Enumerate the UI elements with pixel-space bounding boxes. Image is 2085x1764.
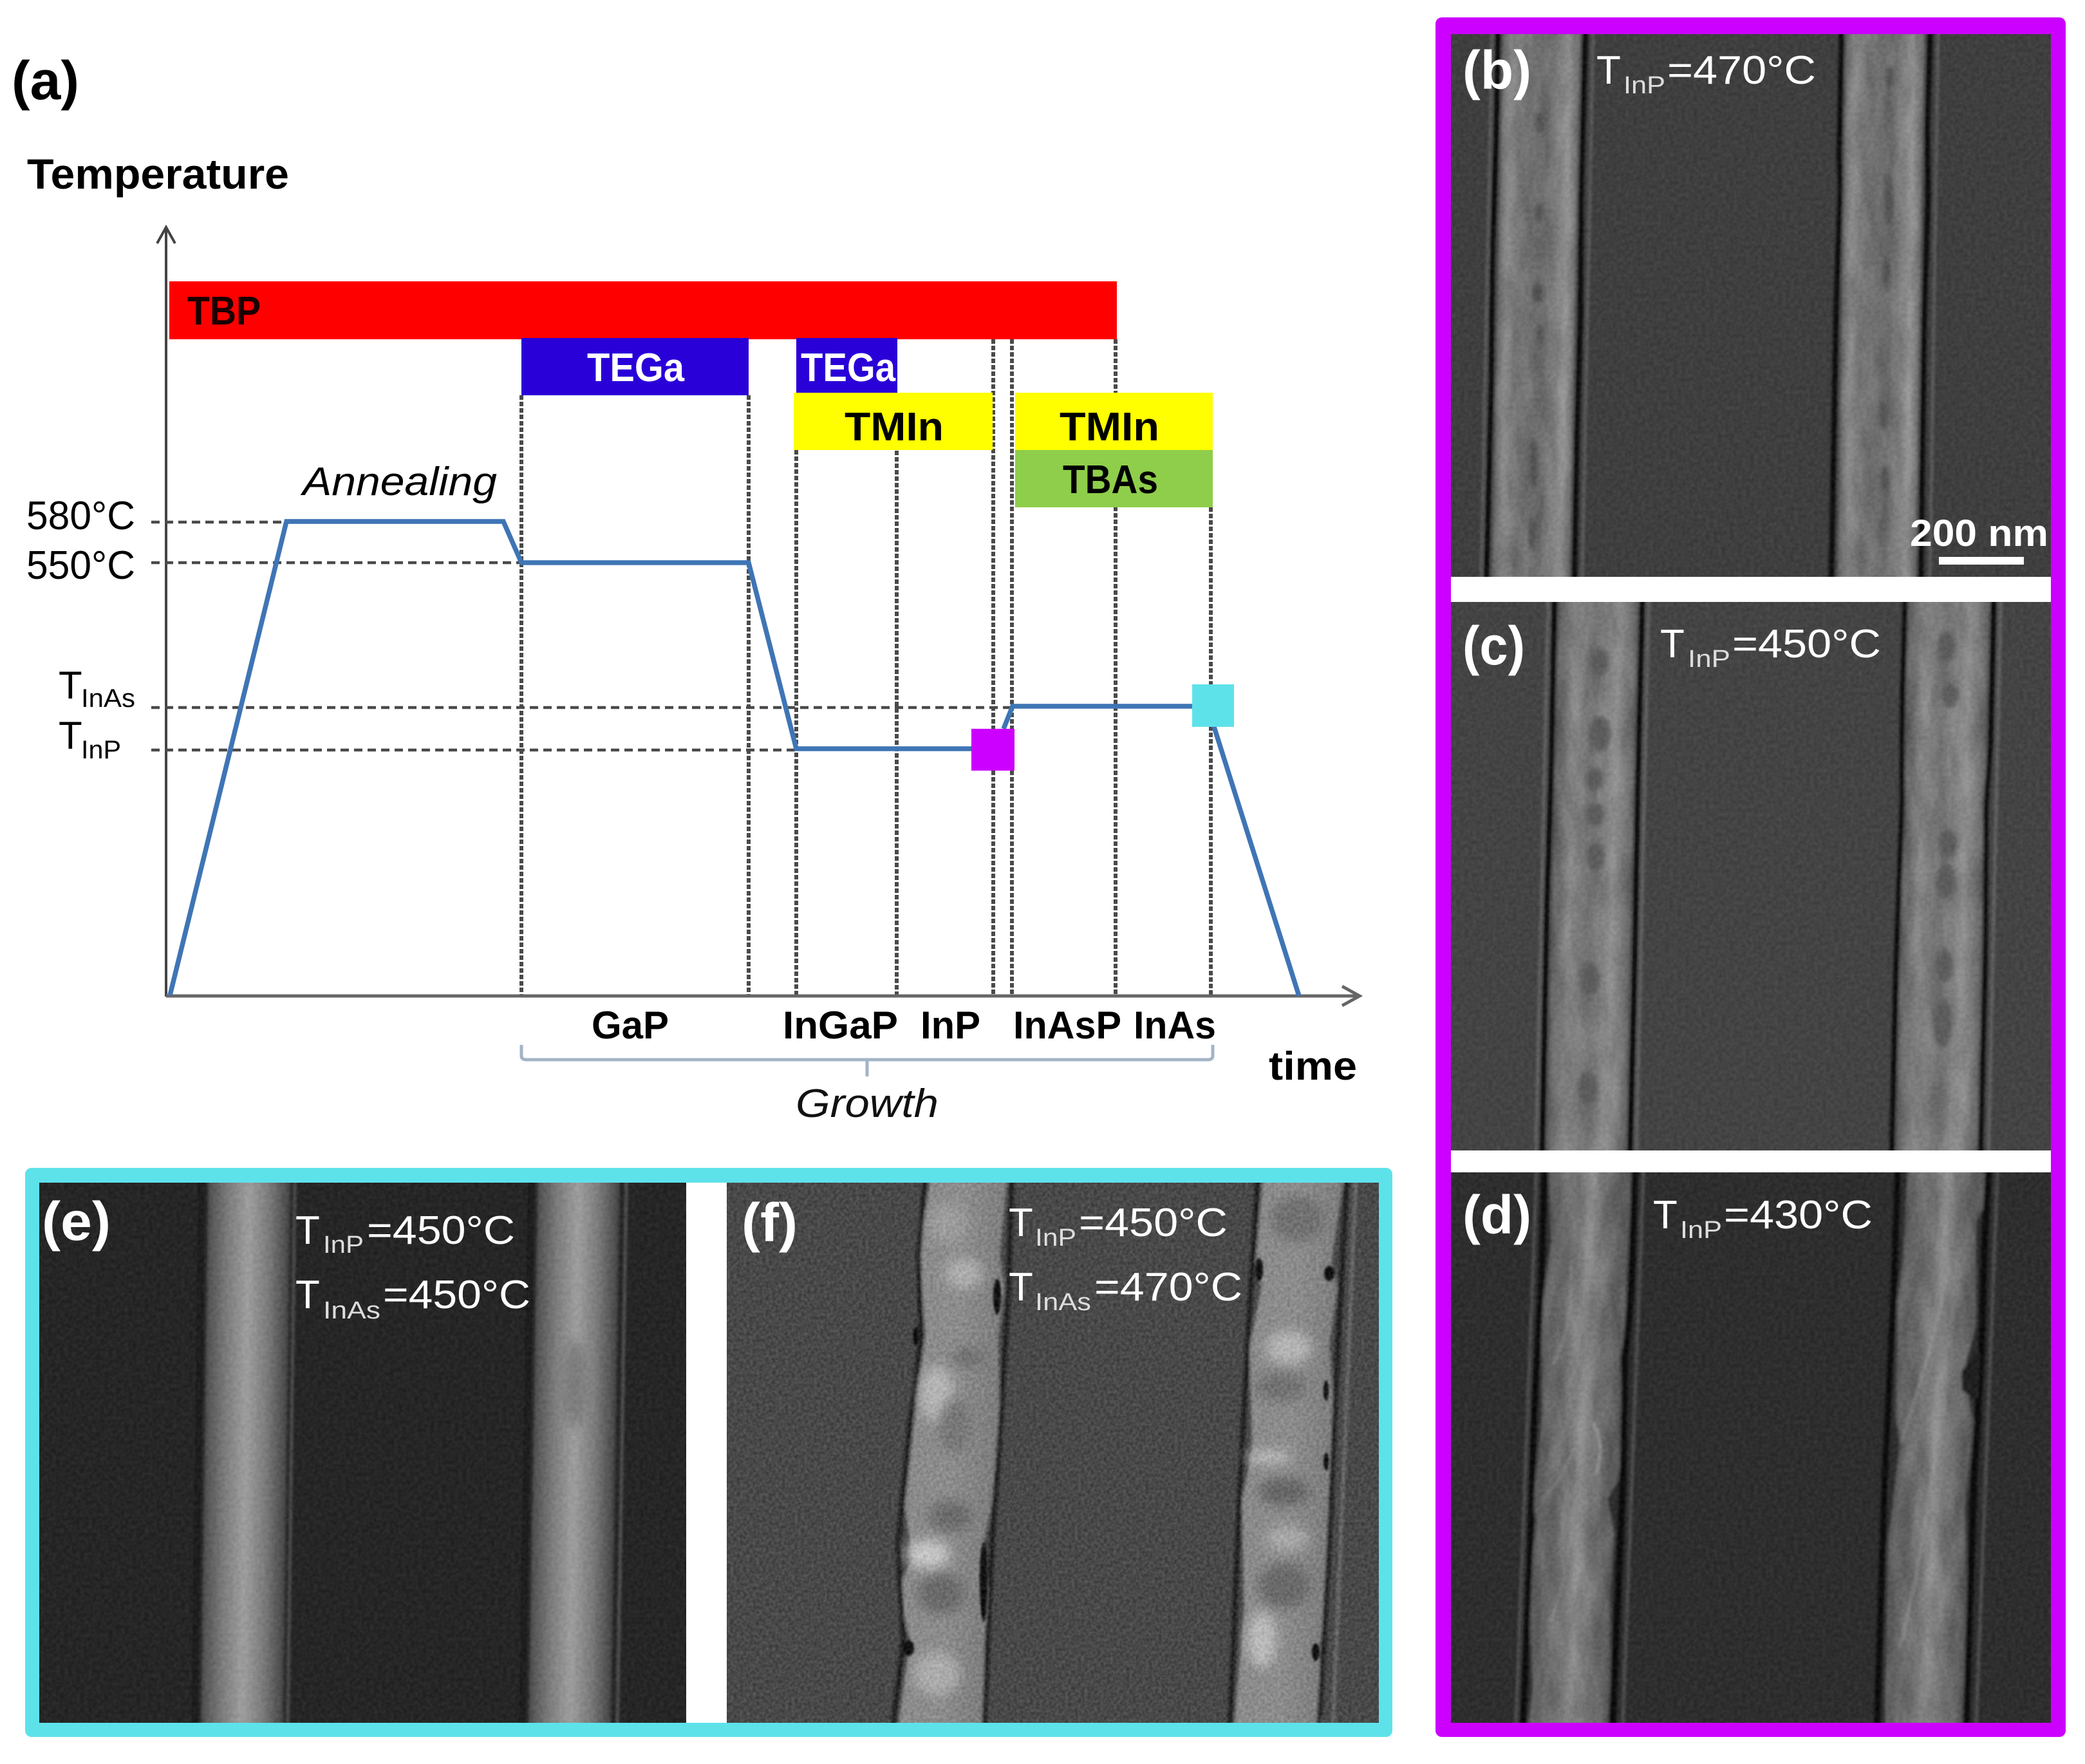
annotation TInAs 450: InAs — [323, 1297, 380, 1324]
vertical dashed phase lines — [521, 339, 1211, 995]
annotation TInP 430: T — [1653, 1193, 1678, 1237]
layer label InAs: InAs — [1134, 1004, 1216, 1047]
annotation TInAs 450: T — [295, 1273, 320, 1317]
annotation TInP 430: InP — [1680, 1217, 1722, 1244]
purple frame for panels b c d — [1435, 17, 2066, 1737]
panel e: SEM image — [39, 1172, 686, 1732]
annotation TInP 450: =450°C — [367, 1208, 515, 1253]
annotation TInP 450: T — [295, 1208, 320, 1253]
SEM image f — [727, 1172, 1379, 1732]
tick label TInP: T — [59, 714, 82, 757]
dark pits c — [1578, 632, 1958, 1105]
annotation TInP 430 — [1653, 1193, 1873, 1244]
bar: TMIn second: TMIn — [1060, 405, 1159, 449]
annotation TInP 450: =450°C — [1079, 1201, 1228, 1245]
annotation TInP 430: =430°C — [1724, 1193, 1873, 1237]
annotation TInP 450 — [1660, 622, 1881, 673]
annotation TInP 470: InP — [1623, 72, 1665, 99]
tick label 580: 580°C — [26, 494, 135, 538]
annotation TInAs 470: T — [1009, 1265, 1033, 1309]
annotation TInAs 470 — [1009, 1265, 1242, 1316]
layer label GaP: GaP — [592, 1004, 669, 1047]
annotation TInAs 470: InAs — [1035, 1289, 1091, 1316]
tick label TInP — [59, 714, 121, 764]
tick label TInAs: InAs — [81, 684, 135, 713]
bar: TMIn second — [1015, 393, 1213, 450]
scale bar: 200 nm — [1910, 512, 2048, 554]
bar: TEGa GaP — [521, 338, 749, 395]
annotation TInP 450: T — [1009, 1201, 1033, 1245]
marker: cyan square — [1192, 684, 1234, 727]
annotation TInP 450: InP — [1035, 1224, 1076, 1252]
layer label InAsP: InAsP — [1013, 1004, 1121, 1047]
SEM image d — [1451, 1165, 2051, 1732]
bar: TBAs: TBAs — [1063, 458, 1158, 502]
panel f: SEM image — [727, 1172, 1379, 1732]
horizontal dashed reference lines — [151, 522, 1014, 750]
bar: TEGa InGaP: TEGa — [801, 346, 895, 390]
tick label TInP: InP — [81, 736, 121, 764]
label e: (e) — [42, 1191, 111, 1252]
bar: TMIn first — [794, 393, 993, 450]
bar: TBAs — [1015, 450, 1213, 507]
marker: purple square — [971, 729, 1014, 771]
SEM image c — [1451, 592, 2051, 1159]
annotation TInP 450: T — [1660, 622, 1685, 666]
annotation TInP 450: =450°C — [1732, 622, 1881, 666]
layer label InP: InP — [921, 1004, 980, 1047]
cyan frame for panels e f — [25, 1168, 1392, 1737]
annotation TInP 470 — [1596, 48, 1816, 99]
panel a: growth temperature profile chart — [12, 50, 1360, 1126]
y axis title: Temperature — [27, 150, 289, 198]
SEM image b — [1451, 26, 2051, 586]
label b: (b) — [1463, 40, 1531, 100]
annotation TInP 470: T — [1596, 48, 1621, 93]
tick label TInAs — [59, 664, 135, 713]
panel d: SEM image — [1451, 1165, 2051, 1732]
annotation TInP 450: InP — [1688, 646, 1730, 673]
panel b: SEM image — [1451, 26, 2051, 586]
x axis title: time — [1269, 1044, 1357, 1089]
layer label InGaP: InGaP — [783, 1004, 898, 1047]
growth label: Growth — [796, 1082, 939, 1126]
bar: TMIn first: TMIn — [845, 405, 944, 449]
label c: (c) — [1463, 615, 1525, 676]
annotation TInP 450 — [295, 1208, 515, 1259]
tick label 550: 550°C — [26, 543, 135, 588]
annotation TInAs 470: =470°C — [1094, 1265, 1242, 1309]
x axis arrow — [166, 986, 1360, 1006]
annotation TInAs 450: =450°C — [383, 1273, 530, 1317]
growth bracket — [521, 1045, 1213, 1076]
label d: (d) — [1463, 1185, 1531, 1245]
annealing label: Annealing — [300, 460, 497, 504]
bar: TBP — [169, 281, 1117, 339]
y axis arrow — [157, 227, 175, 997]
panel label a: (a) — [12, 50, 79, 111]
panel c: SEM image — [1451, 592, 2051, 1159]
annotation TInP 450: InP — [323, 1232, 364, 1259]
label f: (f) — [742, 1192, 798, 1253]
annotation TInP 470: =470°C — [1667, 48, 1816, 93]
bar: TEGa GaP: TEGa — [587, 346, 684, 390]
tick label TInAs: T — [59, 664, 82, 707]
temperature profile curve — [170, 521, 1299, 996]
SEM image e — [39, 1172, 686, 1732]
annotation TInP 450 — [1009, 1201, 1228, 1252]
annotation TInAs 450 — [295, 1273, 530, 1324]
bar: TBP: TBP — [187, 289, 261, 333]
dark pits b — [1529, 66, 1894, 552]
